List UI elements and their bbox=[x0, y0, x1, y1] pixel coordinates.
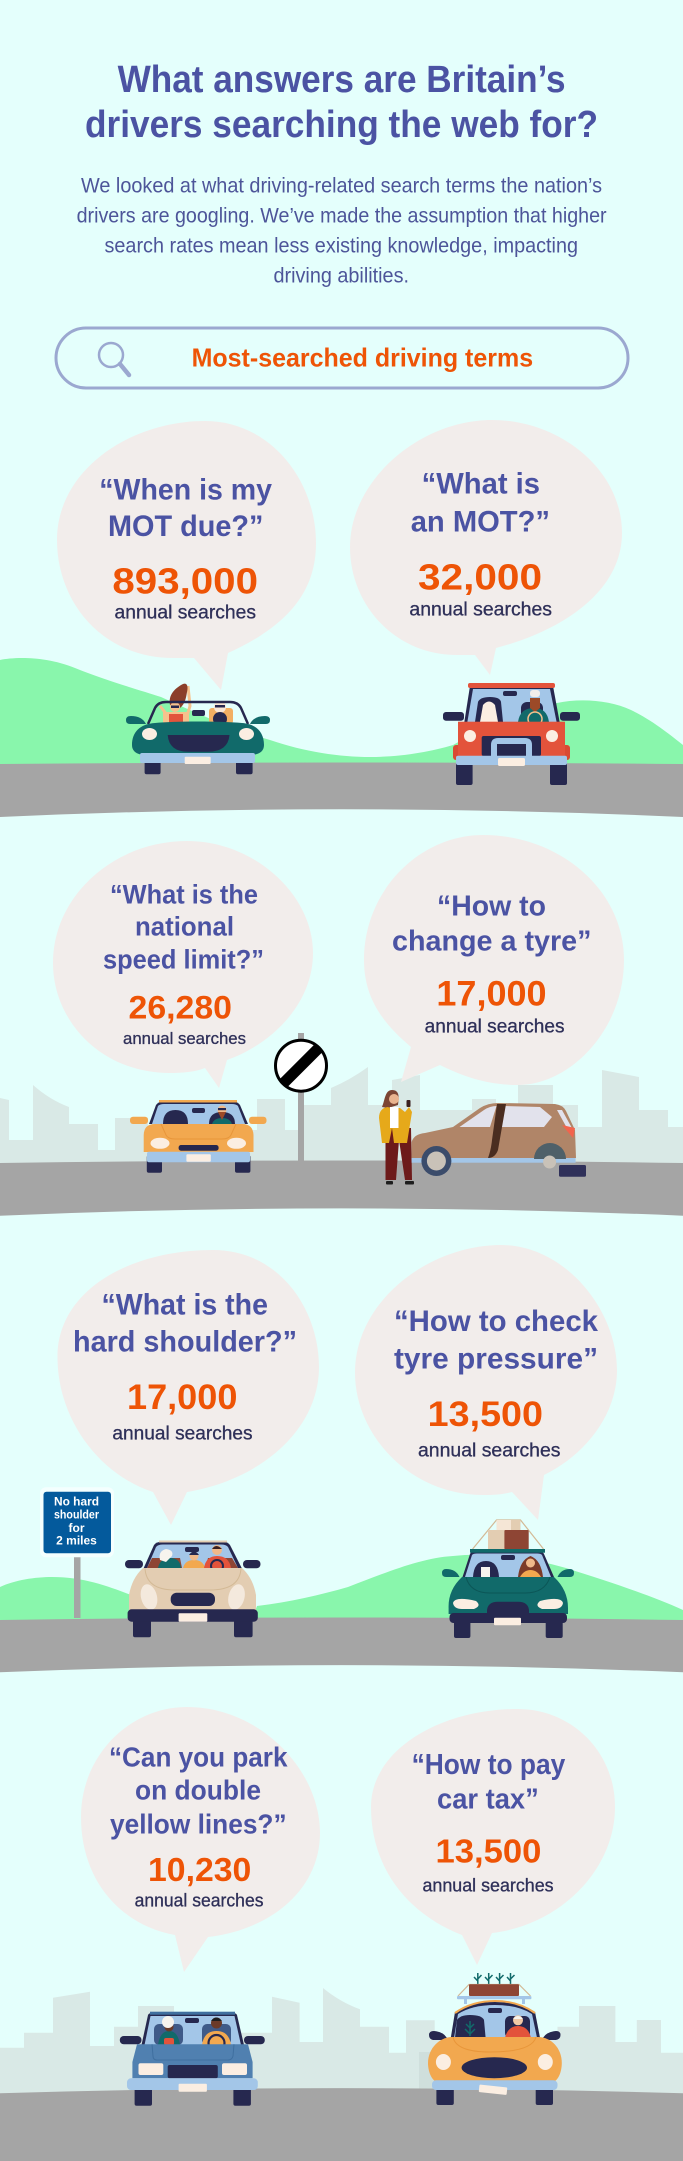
speech bubble: double yellow lines: yellow lines?” bbox=[110, 1808, 287, 1839]
speech bubble: what is an MOT: annual searches bbox=[409, 600, 552, 621]
speech bubble: national speed limit: annual searches bbox=[123, 1029, 246, 1048]
speech bubble: double yellow lines: “Can you park bbox=[109, 1742, 288, 1773]
speech bubble: double yellow lines bbox=[81, 1707, 320, 1972]
speech bubble: when is my MOT due: “When is my bbox=[99, 473, 272, 506]
title: drivers searching the web for? bbox=[85, 104, 598, 146]
icon: roof plants bbox=[474, 1973, 514, 1984]
road sign: no hard shoulder: No hard bbox=[54, 1495, 99, 1509]
title bbox=[85, 59, 598, 146]
speech bubble: how to change a tyre: 17,000 bbox=[436, 974, 547, 1013]
road: scene 1 bbox=[0, 762, 683, 817]
national speed limit sign bbox=[276, 1033, 326, 1162]
speech bubble: national speed limit: 26,280 bbox=[128, 989, 232, 1025]
skyline: scene 2 bbox=[0, 1067, 683, 1170]
icon: magnifying glass bbox=[99, 343, 129, 375]
car: red truck bbox=[443, 683, 580, 785]
car: beige family car bbox=[125, 1540, 260, 1637]
speech bubble: what is an MOT bbox=[350, 420, 622, 675]
speech bubble: how to change a tyre: change a tyre” bbox=[392, 926, 592, 958]
speech bubble: how to change a tyre: “How to bbox=[437, 891, 546, 923]
speech bubble: national speed limit: speed limit?” bbox=[103, 944, 264, 974]
car: blue saloon bbox=[120, 2012, 265, 2106]
road: scene 2 bbox=[0, 1160, 683, 1216]
title: What answers are Britain’s bbox=[118, 59, 566, 101]
speech bubble: car tax: annual searches bbox=[422, 1876, 554, 1896]
road sign: no hard shoulder: 2 miles bbox=[56, 1534, 97, 1548]
search bar bbox=[56, 328, 628, 388]
car: brown car with flat tyre bbox=[412, 1103, 586, 1177]
intro text bbox=[77, 175, 607, 288]
speech bubble: car tax: car tax” bbox=[437, 1783, 539, 1815]
speech bubble: how to change a tyre bbox=[364, 835, 624, 1085]
road: scene 4 bbox=[0, 2088, 683, 2161]
search heading: Most-searched driving terms bbox=[192, 343, 533, 373]
woman checking phone bbox=[379, 1090, 414, 1184]
hills: scene 3 bbox=[0, 1555, 683, 1625]
car: orange hatchback bbox=[130, 1100, 266, 1173]
car: teal car with roof boxes bbox=[442, 1520, 574, 1638]
speech bubble: tyre pressure: tyre pressure” bbox=[394, 1342, 598, 1375]
intro text: search rates mean less existing knowledge, impacting bbox=[104, 235, 578, 258]
hills: scene 1 bbox=[0, 658, 683, 770]
speech bubble: hard shoulder: 17,000 bbox=[127, 1378, 237, 1417]
speech bubble: what is an MOT: an MOT?” bbox=[411, 506, 550, 539]
intro text: driving abilities. bbox=[274, 265, 409, 288]
speech bubble: car tax: 13,500 bbox=[436, 1833, 541, 1870]
intro text: drivers are googling. We’ve made the assumption that higher bbox=[77, 205, 607, 228]
road sign: no hard shoulder bbox=[40, 1487, 114, 1618]
road: scene 3 bbox=[0, 1618, 683, 1672]
speech bubble: national speed limit: national bbox=[135, 912, 234, 942]
speech bubble: national speed limit: “What is the bbox=[110, 879, 258, 909]
speech bubble: hard shoulder bbox=[58, 1250, 319, 1525]
speech bubble: when is my MOT due: annual searches bbox=[114, 602, 256, 623]
speech bubble: what is an MOT: 32,000 bbox=[418, 556, 542, 597]
speech bubble: tyre pressure: annual searches bbox=[418, 1441, 560, 1462]
speech bubble: double yellow lines: 10,230 bbox=[148, 1851, 251, 1888]
car: green convertible bbox=[126, 684, 270, 774]
speech bubble: tyre pressure bbox=[355, 1245, 617, 1520]
speech bubble: how to change a tyre: annual searches bbox=[425, 1017, 564, 1038]
skyline: scene 4 bbox=[0, 1988, 683, 2100]
speech bubble: hard shoulder: hard shoulder?” bbox=[73, 1326, 297, 1359]
speech bubble: national speed limit bbox=[53, 841, 313, 1088]
road sign: no hard shoulder: for bbox=[68, 1521, 85, 1535]
speech bubble: what is an MOT: “What is bbox=[422, 467, 540, 500]
intro text: We looked at what driving-related search terms the nation’s bbox=[81, 175, 602, 198]
speech bubble: hard shoulder: annual searches bbox=[112, 1423, 253, 1444]
speech bubble: car tax: “How to pay bbox=[412, 1749, 565, 1781]
speech bubble: when is my MOT due: 893,000 bbox=[112, 560, 258, 601]
speech bubble: double yellow lines: on double bbox=[135, 1774, 261, 1805]
speech bubble: tyre pressure: “How to check bbox=[394, 1305, 598, 1338]
speech bubble: double yellow lines: annual searches bbox=[135, 1891, 264, 1911]
road sign: no hard shoulder: shoulder bbox=[54, 1508, 99, 1522]
speech bubble: tyre pressure: 13,500 bbox=[428, 1395, 543, 1434]
speech bubble: when is my MOT due: MOT due?” bbox=[108, 510, 264, 543]
car: yellow car with plants bbox=[428, 1973, 562, 2105]
speech bubble: car tax bbox=[371, 1709, 615, 1965]
speech bubble: hard shoulder: “What is the bbox=[102, 1288, 268, 1321]
speech bubble: when is my MOT due bbox=[57, 421, 316, 690]
